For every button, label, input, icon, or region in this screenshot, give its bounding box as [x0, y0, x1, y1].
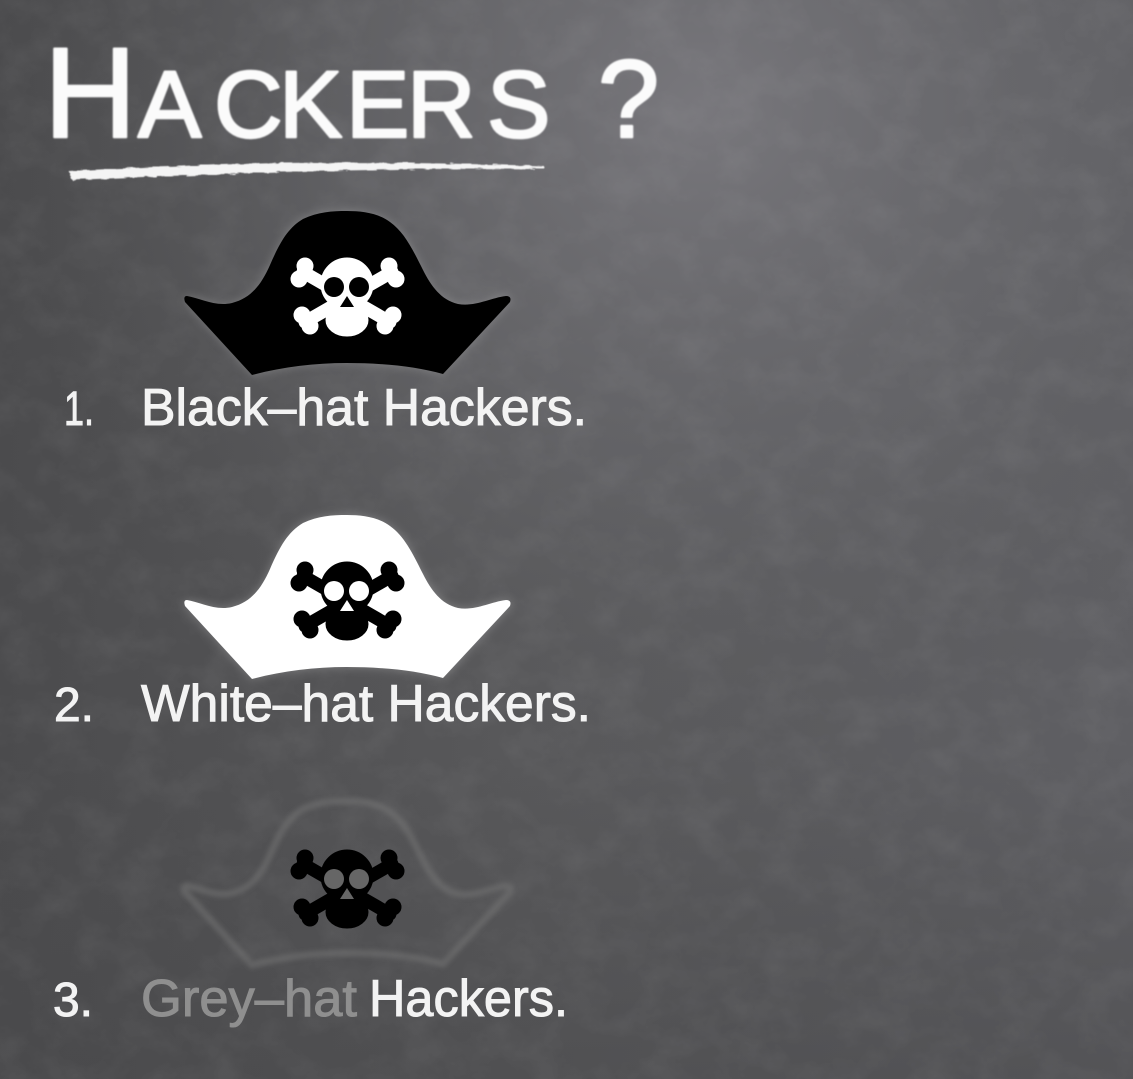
icon: grey pirate hat	[184, 801, 511, 965]
icon: black pirate hat	[184, 211, 511, 375]
item 3: grey-hat hackers: Hackers.	[369, 970, 568, 1028]
item 2: white-hat hackers: 2.	[54, 679, 94, 732]
item 3: grey-hat hackers: Grey–hat	[141, 970, 358, 1028]
item 3: grey-hat hackers	[53, 970, 568, 1028]
title	[44, 22, 659, 180]
item 3: grey-hat hackers: 3.	[53, 974, 93, 1027]
title: H	[44, 22, 136, 165]
item 1: black-hat hackers: Black–hat Hackers.	[141, 379, 587, 437]
title: ?	[598, 38, 659, 161]
title underline	[69, 163, 544, 180]
icon: white pirate hat	[184, 515, 511, 679]
item 2: white-hat hackers: White–hat Hackers.	[141, 675, 591, 733]
item 1: black-hat hackers: 1.	[64, 383, 94, 436]
title: ACKERS	[138, 52, 550, 158]
